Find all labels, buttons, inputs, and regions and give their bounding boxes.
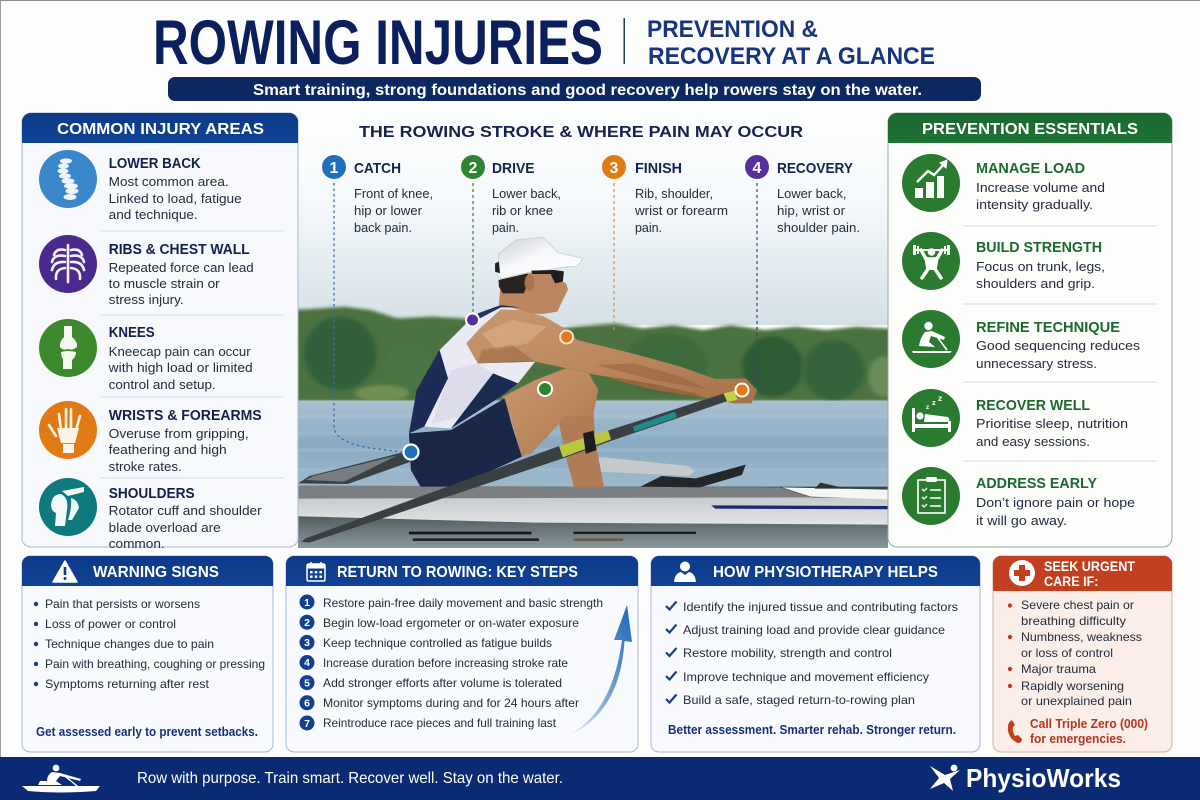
panel: return to rowing [286, 556, 638, 752]
urgent list: Numbness, weakness [1021, 630, 1142, 644]
item: refine technique: Good sequencing reduces [976, 338, 1141, 353]
item: ribs and chest wall: Repeated force can lead [109, 260, 254, 275]
title: RECOVERY AT A GLANCE [648, 43, 935, 70]
phase: recovery: 4 [753, 160, 762, 177]
item: ribs and chest wall [39, 235, 254, 307]
panel header: urgent care [993, 556, 1172, 591]
item: shoulders: SHOULDERS [109, 486, 195, 502]
stretcher [640, 465, 746, 487]
physiotherapy checklist: Restore mobility, strength and control [683, 646, 892, 660]
item: wrists and forearms [39, 401, 262, 474]
urgent list [1008, 598, 1142, 708]
item: manage load: Increase volume and [976, 180, 1105, 195]
warning list: Pain with breathing, coughing or pressing [45, 657, 265, 671]
item: wrists and forearms: feathering and high [109, 442, 227, 457]
shorts [409, 398, 522, 487]
item: recover well: z [938, 393, 942, 403]
warning list [34, 597, 265, 691]
item: knees: with high load or limited [108, 360, 253, 375]
item: build strength [902, 232, 1105, 291]
phase: catch [322, 155, 433, 235]
hull side [290, 497, 903, 525]
far shin [559, 413, 604, 488]
subtitle banner [168, 77, 981, 101]
panel header: return to rowing: RETURN TO ROWING: KEY STEPS [337, 564, 578, 581]
thigh [503, 368, 598, 457]
item: knees [39, 319, 253, 392]
item: knees: Kneecap pain can occur [109, 344, 251, 359]
phase: drive: Lower back, [492, 187, 561, 201]
item: recover well: z [926, 404, 930, 411]
marker: ribs [466, 314, 479, 326]
item: recover well: RECOVER WELL [976, 397, 1090, 414]
item: wrists and forearms: stroke rates. [109, 459, 182, 474]
oar [301, 393, 730, 543]
phase: finish: wrist or forearm [634, 204, 728, 218]
item: ribs and chest wall: to muscle strain or [109, 276, 220, 291]
item: recover well: Prioritise sleep, nutrition [976, 416, 1128, 431]
panel header: urgent care: CARE IF: [1044, 573, 1098, 589]
item: address early [902, 467, 1135, 528]
item: lower back [39, 150, 242, 222]
phase: catch: CATCH [354, 160, 401, 177]
urgent list: or loss of control [1021, 646, 1113, 660]
numbered steps: Reintroduce race pieces and full training last [323, 716, 557, 730]
marker: knee [538, 382, 552, 396]
panel header: prevention essentials: PREVENTION ESSENTIALS [922, 121, 1138, 138]
phase: drive: pain. [492, 221, 519, 235]
numbered steps: Begin low-load ergometer or on-water exposure [323, 616, 579, 630]
item: recover well: and easy sessions. [976, 434, 1090, 449]
numbered steps: 4 [304, 657, 310, 669]
emergency call: Call Triple Zero (000) [1030, 717, 1148, 731]
urgent list: Severe chest pain or [1021, 598, 1134, 612]
item: refine technique [902, 310, 1141, 371]
phase: recovery [745, 155, 860, 235]
callout lines and pain markers [334, 183, 757, 460]
urgent list: or unexplained pain [1021, 694, 1132, 708]
item: build strength: Focus on trunk, legs, [976, 259, 1105, 274]
logo: PhysioWorks: PhysioWorks [966, 763, 1121, 793]
physiotherapy checklist: Improve technique and movement efficiency [683, 670, 929, 684]
warning list: Loss of power or control [45, 617, 176, 631]
phase: recovery: hip, wrist or [777, 204, 845, 218]
heading: rowing stroke: THE ROWING STROKE & WHERE PAIN MAY OCCUR [359, 124, 803, 141]
item: shoulders: common. [109, 536, 165, 551]
panel header: common injury areas [22, 113, 298, 143]
panel: warning signs [22, 556, 273, 752]
numbered steps: 2 [304, 617, 310, 629]
panel header: warning signs [22, 556, 273, 586]
item: address early: ADDRESS EARLY [976, 475, 1097, 492]
item: build strength: BUILD STRENGTH [976, 239, 1102, 256]
rigger [598, 457, 694, 476]
phase: recovery: Lower back, [777, 187, 846, 201]
panel header: prevention essentials [888, 113, 1172, 143]
item: address early: Don’t ignore pain or hope [976, 495, 1135, 510]
numbered steps: 1 [304, 597, 310, 609]
panel header: physiotherapy [651, 556, 980, 586]
progress arrow [565, 605, 632, 737]
numbered steps: 6 [304, 698, 310, 710]
item: refine technique: REFINE TECHNIQUE [976, 319, 1120, 336]
slide seat rails [298, 453, 411, 484]
panel: how physiotherapy helps [651, 556, 980, 752]
physiotherapy checklist [666, 600, 958, 707]
footer band [0, 757, 1200, 800]
phase: drive: rib or knee [492, 204, 553, 218]
phase: finish: pain. [635, 221, 662, 235]
neck and face [499, 270, 568, 314]
item: recover well [902, 389, 1128, 449]
footer slogan: Row with purpose. Train smart. Recover well. Stay on the water. [137, 770, 563, 787]
numbered steps [300, 594, 603, 730]
numbered steps: Add stronger efforts after volume is tolerated [323, 676, 562, 690]
warning list: Symptoms returning after rest [45, 677, 210, 691]
numbered steps: Monitor symptoms during and for 24 hours after [323, 696, 579, 710]
marker: wrist [736, 384, 748, 396]
cap [497, 237, 583, 279]
panel header: physiotherapy: HOW PHYSIOTHERAPY HELPS [713, 564, 938, 581]
panel: common injury areas [22, 113, 298, 551]
marker: lower back [404, 444, 418, 460]
emergency call [1008, 717, 1148, 746]
torso and arm skin [466, 309, 757, 403]
panel: stroke heading and phases [322, 124, 860, 235]
phase: drive [461, 155, 561, 235]
item: recover well: z [932, 398, 936, 407]
item: wrists and forearms: WRISTS & FOREARMS [109, 408, 262, 424]
panel header: urgent care: SEEK URGENT [1044, 558, 1135, 574]
item: lower back: Linked to load, fatigue [109, 191, 242, 206]
singlet white [424, 305, 535, 428]
panel: seek urgent care [993, 556, 1172, 752]
phase: recovery: shoulder pain. [777, 221, 860, 235]
phase: finish: Rib, shoulder, [635, 187, 713, 201]
forearm far [605, 376, 704, 398]
phase: catch: hip or lower [354, 204, 422, 218]
urgent list: Rapidly worsening [1021, 679, 1124, 693]
item: ribs and chest wall: stress injury. [109, 292, 184, 307]
phase: finish: 3 [610, 160, 619, 177]
phase: drive: DRIVE [492, 160, 534, 177]
physiotherapy tagline: Better assessment. Smarter rehab. Stronger return. [668, 723, 956, 737]
item: shoulders: Rotator cuff and shoulder [109, 503, 262, 518]
panel header: warning signs: WARNING SIGNS [93, 564, 219, 581]
warning list: Technique changes due to pain [45, 637, 214, 651]
phase: finish: FINISH [635, 160, 682, 177]
numbered steps: 5 [304, 678, 310, 690]
sunglasses [531, 270, 564, 283]
item: refine technique: unnecessary stress. [976, 356, 1097, 371]
singlet navy side [409, 350, 448, 433]
item: lower back: and technique. [109, 207, 198, 222]
phase: recovery: RECOVERY [777, 160, 853, 177]
title: PREVENTION & [647, 16, 818, 43]
marker: shoulder [560, 330, 573, 344]
item: manage load: intensity gradually. [976, 197, 1093, 212]
numbered steps: Restore pain-free daily movement and basic strength [323, 596, 603, 610]
item: address early: it will go away. [976, 513, 1067, 528]
phase: catch: back pain. [354, 221, 412, 235]
physiotherapy checklist: Build a safe, staged return-to-rowing plan [683, 693, 915, 707]
item: manage load: MANAGE LOAD [976, 160, 1085, 177]
urgent list: breathing difficulty [1021, 614, 1126, 628]
item: shoulders [39, 478, 262, 551]
item: build strength: shoulders and grip. [976, 276, 1095, 291]
item: ribs and chest wall: RIBS & CHEST WALL [109, 242, 250, 258]
physiotherapy checklist: Identify the injured tissue and contributing factors [683, 600, 958, 614]
warning tagline: Get assessed early to prevent setbacks. [36, 725, 258, 739]
item: wrists and forearms: Overuse from gripping, [109, 426, 249, 441]
physiotherapy checklist: Adjust training load and provide clear guidance [683, 623, 945, 637]
rowing photo illustration [298, 204, 888, 548]
numbered steps: 7 [304, 718, 310, 730]
phase: drive: 2 [469, 160, 478, 177]
panel header: common injury areas: COMMON INJURY AREAS [57, 121, 264, 138]
numbered steps: Keep technique controlled as fatigue builds [323, 636, 552, 650]
subtitle banner: Smart training, strong foundations and good recovery help rowers stay on the water. [253, 82, 922, 99]
item: manage load [902, 154, 1105, 212]
item: shoulders: blade overload are [109, 520, 221, 535]
numbered steps: 3 [304, 637, 310, 649]
title: ROWING INJURIES [153, 8, 603, 78]
panel header: return to rowing [286, 556, 638, 586]
item: knees: KNEES [109, 325, 155, 341]
phase: catch: Front of knee, [354, 187, 433, 201]
warning list: Pain that persists or worsens [45, 597, 200, 611]
phase: catch: 1 [330, 160, 339, 177]
hull deck [290, 485, 815, 499]
item: lower back: LOWER BACK [109, 156, 201, 172]
urgent list: Major trauma [1021, 662, 1096, 676]
item: lower back: Most common area. [109, 174, 229, 189]
numbered steps: Increase duration before increasing stroke rate [323, 656, 568, 670]
emergency call: for emergencies. [1030, 732, 1126, 746]
panel: prevention essentials [888, 113, 1172, 547]
icon: rower [22, 765, 100, 792]
item: knees: control and setup. [109, 377, 216, 392]
phase: finish [602, 155, 728, 235]
